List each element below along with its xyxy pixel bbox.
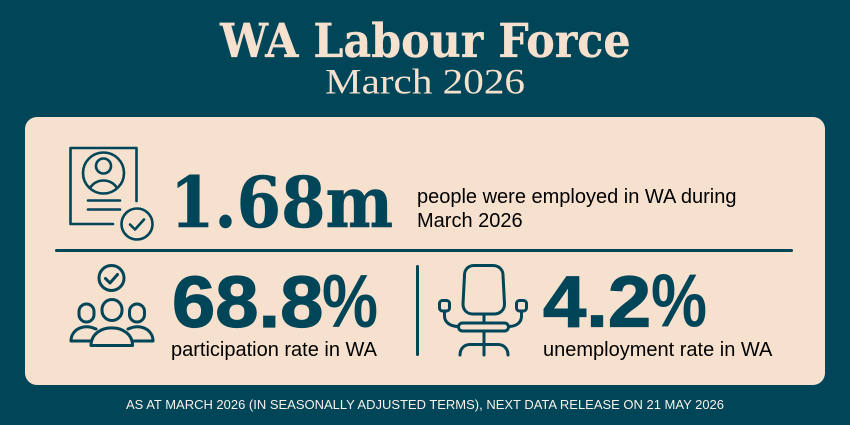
divider <box>55 249 793 252</box>
text: employed description: March 2026 <box>417 210 523 232</box>
icon: office chair <box>440 266 526 355</box>
statistic: employed: 1.68m <box>170 161 393 244</box>
statistic: unemployment rate: 4.2 <box>543 261 651 342</box>
text: employed description: people were employed in WA during <box>417 186 736 208</box>
statistic: participation rate: 68.8 <box>172 262 323 342</box>
subtitle: March 2026 <box>325 62 525 102</box>
statistic: participation rate: % <box>322 259 378 343</box>
icon: participating people <box>71 266 153 346</box>
footer note: AS AT MARCH 2026 (IN SEASONALLY ADJUSTED TERMS), NEXT DATA RELEASE ON 21 MAY 2026 <box>126 398 724 412</box>
divider vertical <box>416 265 419 356</box>
statistic: unemployment rate <box>543 258 707 342</box>
title: WA Labour Force <box>219 13 631 68</box>
statistic: unemployment rate: % <box>651 258 707 342</box>
icon: employment document <box>70 148 152 240</box>
text: unemployment label: unemployment rate in WA <box>543 339 773 361</box>
text: participation label: participation rate in WA <box>171 339 378 361</box>
panel: statistics <box>25 117 825 385</box>
